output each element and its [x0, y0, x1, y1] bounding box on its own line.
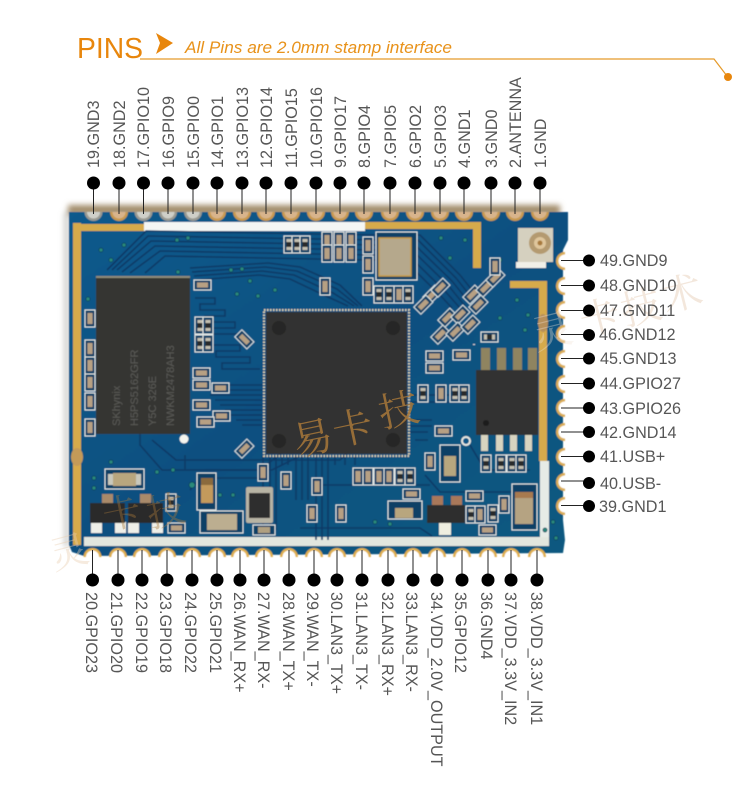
top pin labels: 4.GND1 [456, 110, 474, 168]
top pin labels: 1.GND [532, 119, 550, 168]
crystal oscillator [376, 232, 417, 280]
title: PINS [77, 33, 732, 81]
bottom pin labels: 24.GPIO22 [181, 592, 199, 673]
bottom pin labels: 35.GPIO12 [451, 592, 469, 673]
bottom pin labels: 29.WAN_TX- [303, 592, 321, 687]
watermark: 灵 [45, 528, 93, 579]
large capacitors [105, 445, 537, 533]
watermark: 术 [658, 268, 707, 321]
bottom pin labels [82, 592, 545, 767]
bottom pin labels: 36.GND4 [477, 592, 495, 659]
right pin leaders [561, 254, 595, 512]
chip marking: H5PS5162GFR [129, 350, 141, 426]
board shadow [64, 205, 560, 547]
chip marking [111, 345, 177, 426]
top pin labels: 6.GPIO2 [407, 105, 425, 168]
title: PINS: PINS [77, 33, 143, 65]
bottom pin labels: 27.WAN_RX- [254, 592, 272, 689]
subtitle: All Pins are 2.0mm stamp interface [184, 39, 452, 57]
top pin labels: 11.GPIO15 [283, 88, 301, 168]
bottom pin labels: 20.GPIO23 [82, 592, 100, 673]
power inductor [246, 487, 275, 535]
top pin labels: 15.GPIO0 [185, 96, 203, 168]
top pin labels: 18.GND2 [111, 101, 129, 168]
bottom pin labels: 37.VDD_3.3V_IN2 [501, 592, 519, 725]
bottom pin labels: 26.WAN_RX+ [230, 592, 248, 693]
right pin labels: 39.GND1 [599, 498, 666, 516]
bottom pin labels: 23.GPIO18 [156, 592, 174, 673]
bottom pin labels: 28.WAN_TX+ [279, 592, 297, 691]
bottom pin labels: 31.LAN3_TX- [352, 592, 370, 690]
right pin labels [599, 252, 681, 516]
top pin labels: 16.GPIO9 [160, 96, 178, 168]
top pin labels: 5.GPIO3 [432, 105, 450, 168]
top pin labels: 12.GPIO14 [258, 87, 276, 168]
right pin labels: 49.GND9 [600, 252, 667, 270]
watermark: 技 [143, 488, 189, 537]
right castellated pads [556, 252, 565, 515]
bottom pin labels: 32.LAN3_RX+ [378, 592, 396, 696]
vias [86, 236, 558, 540]
8-pin flash chip [462, 344, 538, 451]
top pin labels: 8.GPIO4 [356, 105, 374, 168]
watermark: 卡 [576, 292, 625, 345]
right pin labels: 45.GND13 [600, 350, 676, 368]
top pin labels: 10.GPIO16 [308, 87, 326, 168]
watermark: 技 [375, 385, 423, 437]
right pin labels: 40.USB- [600, 475, 661, 493]
right pin labels: 43.GPIO26 [600, 400, 681, 418]
top pin labels: 7.GPIO5 [382, 105, 400, 168]
top castellated pads [84, 212, 549, 221]
watermark [45, 268, 707, 579]
bottom pin labels: 33.LAN3_RX- [402, 592, 420, 692]
watermark: 卡 [329, 403, 377, 455]
bottom pin labels: 22.GPIO19 [132, 592, 150, 673]
right pin labels: 41.USB+ [600, 448, 665, 466]
top pin labels: 2.ANTENNA [507, 77, 525, 168]
heading rule with end dot [140, 59, 732, 81]
top pin leaders [87, 176, 546, 214]
bottom pin leaders [86, 550, 544, 586]
photo: PCB module [64, 205, 568, 557]
top pin labels [85, 77, 550, 168]
bottom pin labels: 34.VDD_2.0V_OUTPUT [427, 592, 445, 767]
bottom pin labels: 30.LAN3_TX+ [327, 592, 345, 694]
watermark: 技 [617, 282, 666, 335]
voltage regulators [90, 494, 465, 535]
RAM chip [96, 276, 190, 444]
chip marking: NWKM2478AH3 [165, 345, 177, 426]
top pin labels: 17.GPIO10 [135, 87, 153, 168]
top pin labels: 3.GND0 [483, 110, 501, 168]
watermark: 卡 [99, 490, 145, 539]
watermark: 易 [289, 413, 337, 465]
watermark: 灵 [528, 306, 577, 359]
top pin labels: 13.GPIO13 [234, 87, 252, 168]
bottom castellated pads [84, 548, 546, 557]
antenna connector [516, 228, 553, 268]
right pin labels: 42.GND14 [600, 424, 676, 442]
right pin labels: 44.GPIO27 [600, 375, 681, 393]
top pin labels: 9.GPIO17 [332, 96, 350, 168]
bottom pin labels: 38.VDD_3.3V_IN1 [527, 592, 545, 725]
bottom pin labels: 21.GPIO20 [107, 592, 125, 673]
main processor chip [264, 310, 409, 456]
top pin labels: 14.GPIO1 [209, 96, 227, 168]
copper traces [107, 231, 530, 540]
right pin labels: 47.GND11 [600, 302, 675, 320]
edge strips: gold and white [71, 222, 549, 546]
bottom pin labels: 25.GPIO21 [206, 592, 224, 673]
right pin labels: 48.GND10 [600, 277, 676, 295]
right pin labels: 46.GND12 [599, 326, 675, 344]
chip marking: SKhynix [111, 385, 123, 426]
top pin labels: 19.GND3 [85, 101, 103, 168]
board substrate [69, 212, 568, 556]
small SMD components [85, 232, 526, 535]
icon: orange arrow [156, 33, 173, 54]
chip marking: Y5C 326E [147, 376, 159, 426]
